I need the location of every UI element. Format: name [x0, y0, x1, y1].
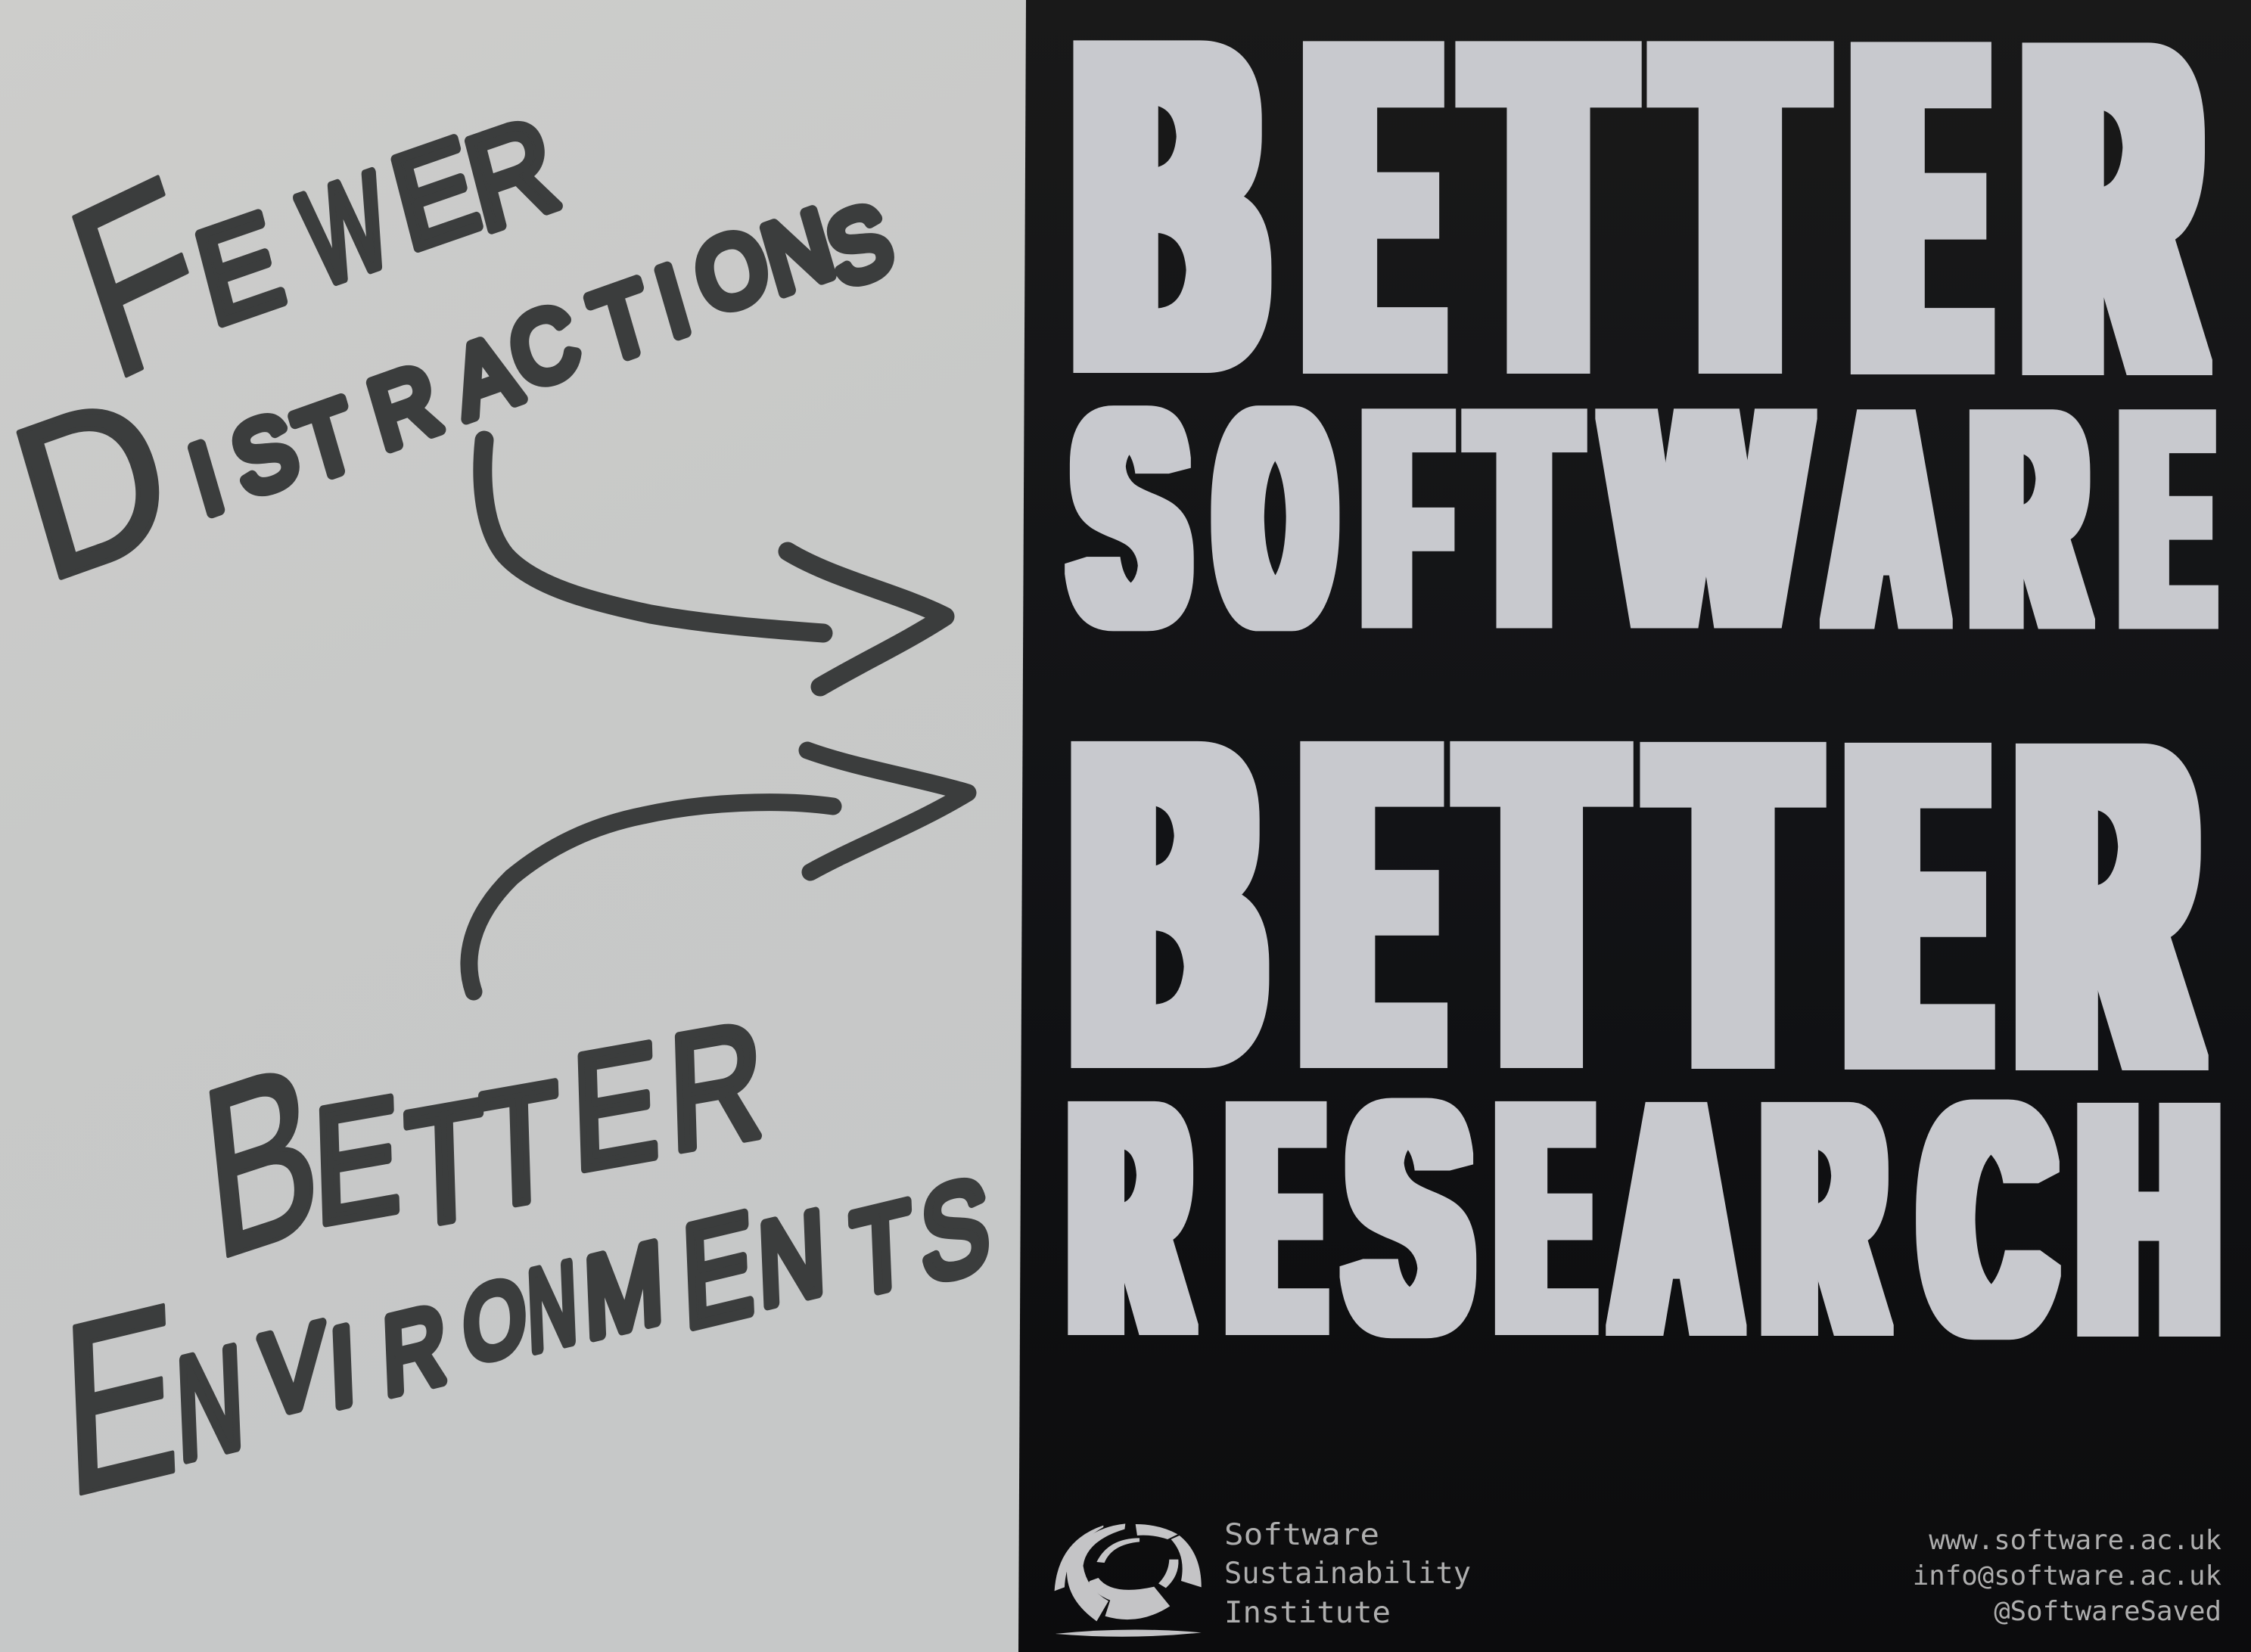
handwritten text: Environments: R — [381, 1281, 448, 1419]
arrow: from Fewer Distractions — [483, 440, 945, 687]
heading: SOFTWARE: R — [1976, 349, 2082, 689]
handwritten text: Fewer: F — [38, 120, 238, 439]
handwritten text: Fewer: R — [452, 88, 571, 260]
heading: RESEARCH: E — [1504, 1036, 1586, 1399]
heading: RESEARCH: R — [1075, 1036, 1184, 1399]
heading: SOFTWARE: S — [1077, 348, 1183, 688]
heading: SOFTWARE: O — [1222, 348, 1329, 688]
handwritten text: Environments: N — [174, 1315, 246, 1492]
heading: SOFTWARE: T — [1476, 348, 1572, 688]
heading: BETTER (second line): B — [1080, 651, 1255, 1157]
handwritten text: Environments: N — [756, 1186, 827, 1332]
handwritten text: Fewer: E — [379, 109, 491, 278]
handwritten text: Environments: E — [679, 1182, 756, 1359]
heading: SOFTWARE: F — [1370, 348, 1444, 688]
handwritten text: Environments: I — [328, 1302, 358, 1431]
handwritten text: Environments: O — [462, 1256, 527, 1385]
handwritten text: Fewer: W — [289, 144, 403, 315]
handwritten text: Environments: M — [582, 1217, 665, 1363]
handwritten text: Environments: V — [259, 1298, 327, 1440]
heading: RESEARCH: E — [1235, 1036, 1317, 1399]
heading: SOFTWARE: A — [1833, 349, 1940, 689]
handwritten text: Environments: T — [849, 1177, 913, 1321]
handwritten text: Environments: E — [58, 1250, 183, 1548]
heading: BETTER (second line): T — [1472, 651, 1611, 1157]
text block: contact details — [1913, 1525, 2221, 1627]
heading: BETTER (second line): E — [1314, 651, 1429, 1157]
handwritten text: Environments: N — [525, 1237, 579, 1376]
handwritten text: Better: ETTER — [310, 986, 766, 1279]
panel: black poster — [1018, 0, 2251, 1652]
panel: white paper background — [0, 0, 1029, 1652]
text block: contact details: @SoftwareSaved — [1994, 1596, 2221, 1627]
heading: RESEARCH: R — [1768, 1037, 1879, 1399]
handwritten text: Fewer: E — [183, 185, 295, 354]
text block: institute name — [1224, 1518, 1471, 1630]
text block: institute name: Sustainability — [1224, 1557, 1471, 1591]
arrow: from Better Environments — [469, 750, 968, 992]
heading: RESEARCH: S — [1352, 1036, 1466, 1399]
text block: contact details: info@software.ac.uk — [1913, 1560, 2221, 1591]
handwritten text: Better: B — [189, 1008, 331, 1315]
handwritten text: Environments: S — [919, 1150, 991, 1310]
heading: RESEARCH: A — [1619, 1037, 1733, 1399]
text block: institute name: Institute — [1224, 1596, 1391, 1630]
text block: institute name: Software — [1224, 1518, 1379, 1552]
logo: Software Sustainability Institute mark — [1055, 1523, 1202, 1637]
heading: BETTER (second line): T — [1662, 651, 1804, 1157]
heading: BETTER (second line): E — [1858, 652, 1977, 1158]
heading: RESEARCH: C — [1926, 1038, 2048, 1400]
heading: SOFTWARE: W — [1612, 348, 1802, 688]
handwritten text: Distractions: ISTRACTIONS — [174, 166, 905, 539]
text block: contact details: www.software.ac.uk — [1929, 1525, 2221, 1556]
